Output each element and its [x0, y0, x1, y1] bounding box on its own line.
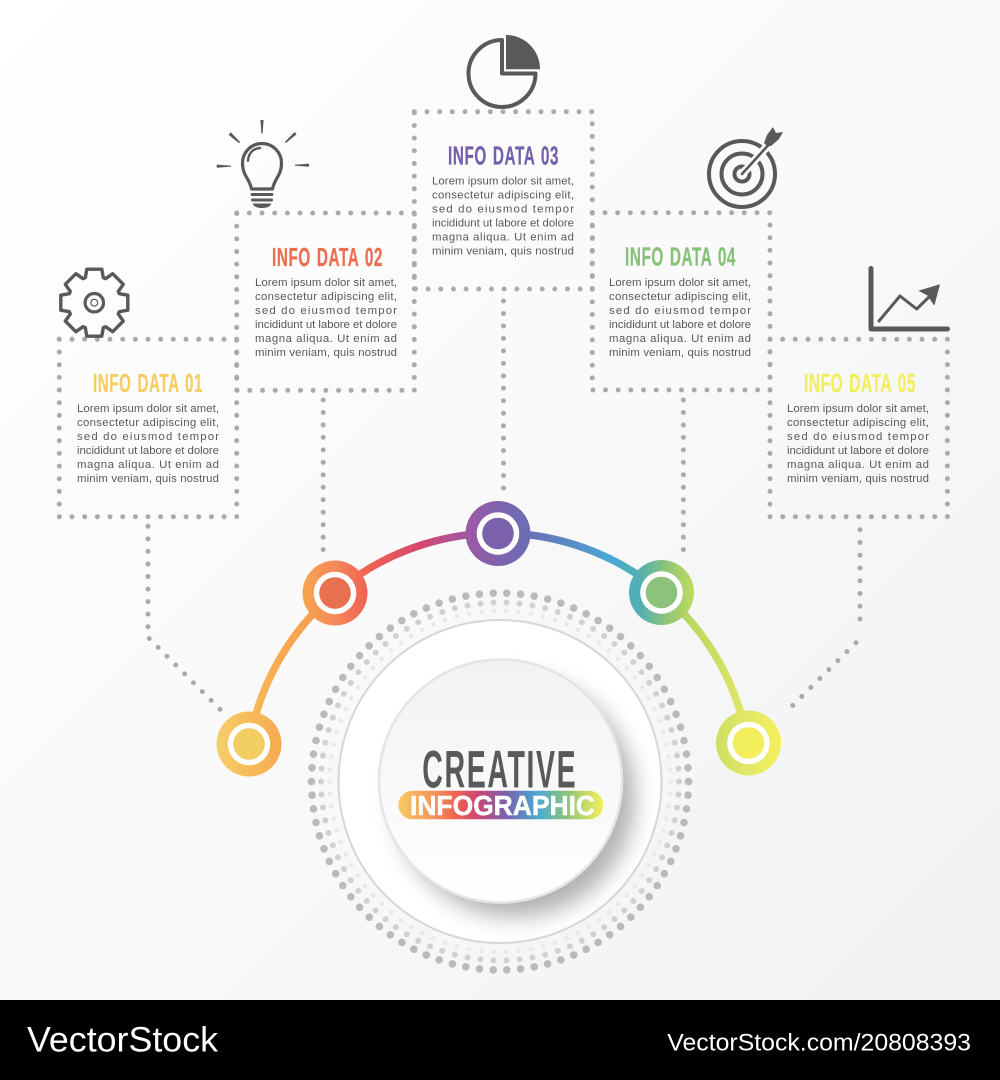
body text 05 — [787, 403, 929, 485]
footer image id: VectorStock.com/20808393 — [667, 1030, 971, 1057]
body text 01: consectetur adipiscing elit, — [77, 417, 219, 429]
rainbow arc — [249, 533, 748, 744]
body text 02: minim veniam, quis nostrud — [255, 347, 397, 359]
panel: info data 04 — [592, 127, 783, 390]
disc shadow — [395, 677, 635, 917]
dotted frame 04 — [592, 213, 770, 390]
body text 02: Lorem ipsum dolor sit amet, — [255, 277, 397, 289]
body text 04: incididunt ut labore et dolore — [609, 319, 751, 331]
icon: gear — [61, 269, 128, 336]
body text 04: sed do eiusmod tempor — [609, 305, 751, 317]
panel: info data 05 — [770, 268, 948, 517]
icon: target with arrow — [709, 127, 783, 207]
connector: info data 03 to node 3 — [501, 301, 506, 492]
footer logo text: VectorStock — [27, 1021, 219, 1060]
connector: info data 05 to node 5 — [784, 530, 860, 714]
body text 01: incididunt ut labore et dolore — [77, 445, 219, 457]
body text 01: sed do eiusmod tempor — [77, 431, 219, 443]
body text 03: consectetur adipiscing elit, — [432, 190, 574, 202]
body text 03: Lorem ipsum dolor sit amet, — [432, 176, 574, 188]
node 3 — [466, 501, 530, 566]
body text 02 — [255, 277, 397, 359]
body text 04: minim veniam, quis nostrud — [609, 347, 751, 359]
dotted frame 02 — [237, 213, 414, 390]
title: creative infographic — [398, 741, 603, 821]
body text 03 — [432, 176, 574, 258]
footer band — [0, 1000, 1000, 1080]
body text 01: Lorem ipsum dolor sit amet, — [77, 403, 219, 415]
node 2 — [302, 560, 368, 626]
body text 01: minim veniam, quis nostrud — [77, 473, 219, 485]
dotted frame 03 — [414, 112, 592, 289]
rainbow pill — [398, 791, 603, 819]
heading 02: INFO DATA 02 — [272, 242, 383, 272]
node 1 — [216, 712, 282, 776]
panel: info data 02 — [217, 120, 414, 390]
node 5 — [716, 710, 781, 776]
word: infographic: INFOGRAPHIC — [410, 790, 595, 821]
icon: pie chart — [468, 35, 540, 107]
body text 02: sed do eiusmod tempor — [255, 305, 397, 317]
body text 03: minim veniam, quis nostrud — [432, 246, 574, 258]
node 4 — [629, 560, 694, 625]
body text 03: magna aliqua. Ut enim ad — [432, 232, 574, 244]
panel: info data 01 — [59, 269, 237, 517]
panel: info data 03 — [414, 35, 592, 289]
connector: info data 01 to node 1 — [148, 526, 220, 709]
large white circle — [338, 620, 662, 943]
dotted halo rings — [312, 593, 688, 970]
body text 05: sed do eiusmod tempor — [787, 431, 929, 443]
heading 01: INFO DATA 01 — [93, 368, 203, 398]
dotted frame 01 — [59, 339, 237, 517]
inner disc — [379, 660, 622, 902]
body text 05: minim veniam, quis nostrud — [787, 473, 929, 485]
body text 04: Lorem ipsum dolor sit amet, — [609, 277, 751, 289]
body text 02: consectetur adipiscing elit, — [255, 291, 397, 303]
heading 03: INFO DATA 03 — [448, 140, 559, 170]
body text 05: incididunt ut labore et dolore — [787, 445, 929, 457]
dotted frame 05 — [770, 339, 947, 517]
heading 05: INFO DATA 05 — [804, 368, 916, 398]
body text 04: magna aliqua. Ut enim ad — [609, 333, 751, 345]
connector: info data 04 to node 4 — [681, 400, 686, 562]
body text 05: magna aliqua. Ut enim ad — [787, 459, 929, 471]
body text 04 — [609, 277, 751, 359]
heading 04: INFO DATA 04 — [625, 242, 736, 272]
body text 01 — [77, 403, 219, 485]
icon: growth chart — [871, 268, 948, 329]
connector: info data 02 to node 2 — [321, 400, 326, 562]
body text 01: magna aliqua. Ut enim ad — [77, 459, 219, 471]
body text 02: magna aliqua. Ut enim ad — [255, 333, 397, 345]
body text 02: incididunt ut labore et dolore — [255, 319, 397, 331]
body text 03: sed do eiusmod tempor — [432, 204, 574, 216]
body text 05: consectetur adipiscing elit, — [787, 417, 929, 429]
body text 05: Lorem ipsum dolor sit amet, — [787, 403, 929, 415]
icon: light bulb — [217, 120, 309, 208]
body text 03: incididunt ut labore et dolore — [432, 218, 574, 230]
body text 04: consectetur adipiscing elit, — [609, 291, 751, 303]
word: creative: CREATIVE — [422, 741, 577, 800]
